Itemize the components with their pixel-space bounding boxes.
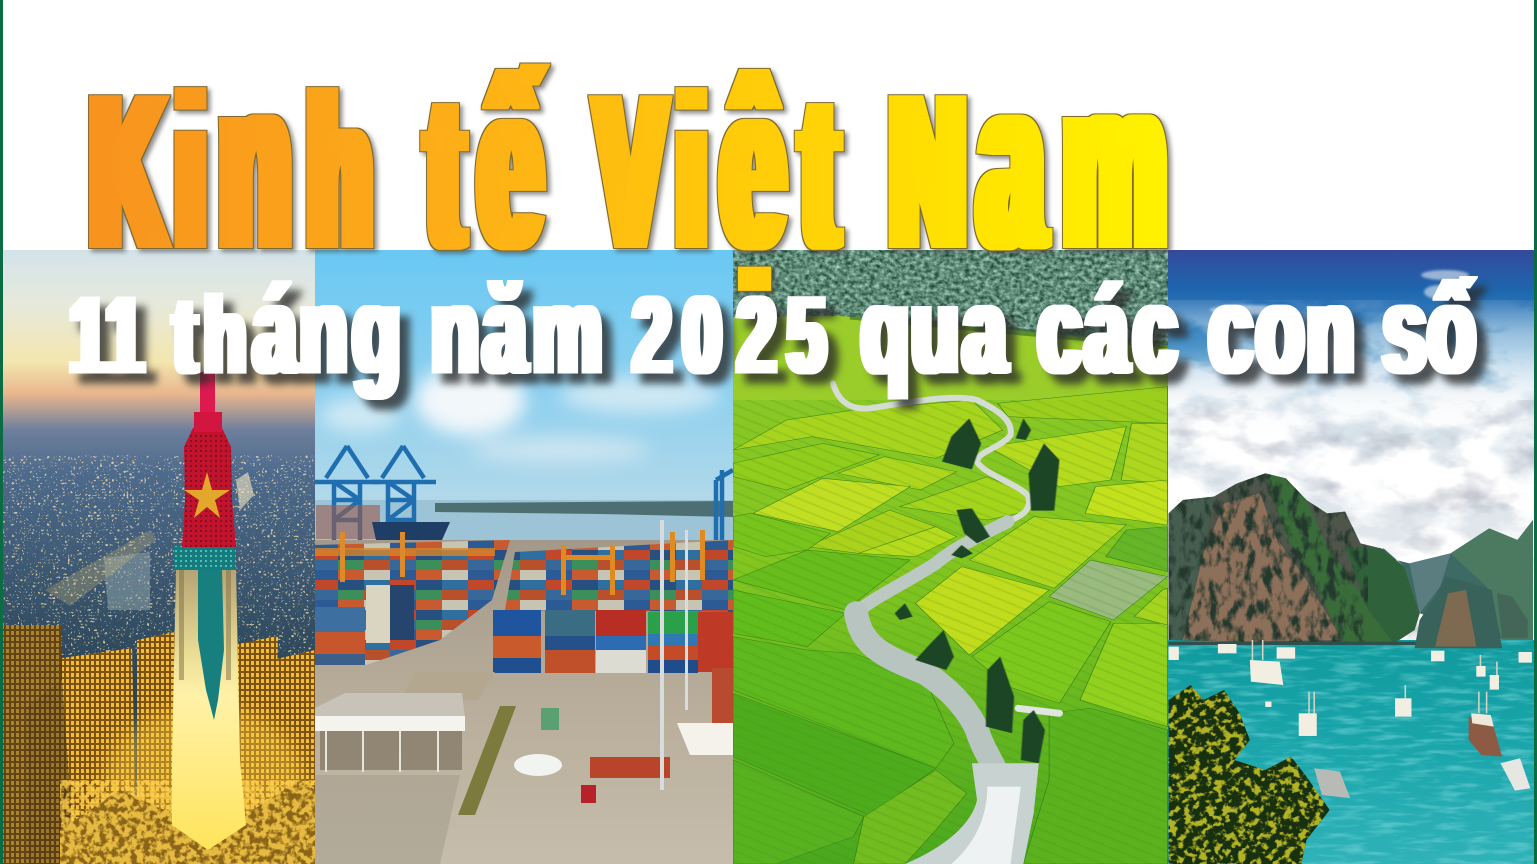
title: am [979, 23, 1165, 301]
photo: rice fields and winding river [733, 250, 1168, 864]
subtitle [70, 261, 1475, 401]
title: Ki [91, 48, 205, 296]
photo: container seaport [315, 250, 733, 864]
title: t N [803, 48, 964, 296]
title [91, 23, 1165, 301]
photo: Landmark 81 tower and city at dusk [3, 250, 315, 864]
title: ệ [722, 31, 784, 299]
title: ế [480, 31, 542, 299]
subtitle: 11 th [70, 274, 246, 397]
title: Vi [552, 48, 706, 296]
title: h t [308, 48, 462, 296]
page edge: green left border [0, 0, 3, 864]
page edge: green right border [1534, 0, 1537, 864]
subtitle: qua các con số [861, 261, 1475, 401]
subtitle: 2025 [633, 274, 850, 397]
subtitle: áng năm [254, 261, 617, 401]
photo: Ha Long Bay [1168, 250, 1534, 864]
title: n [220, 23, 290, 301]
